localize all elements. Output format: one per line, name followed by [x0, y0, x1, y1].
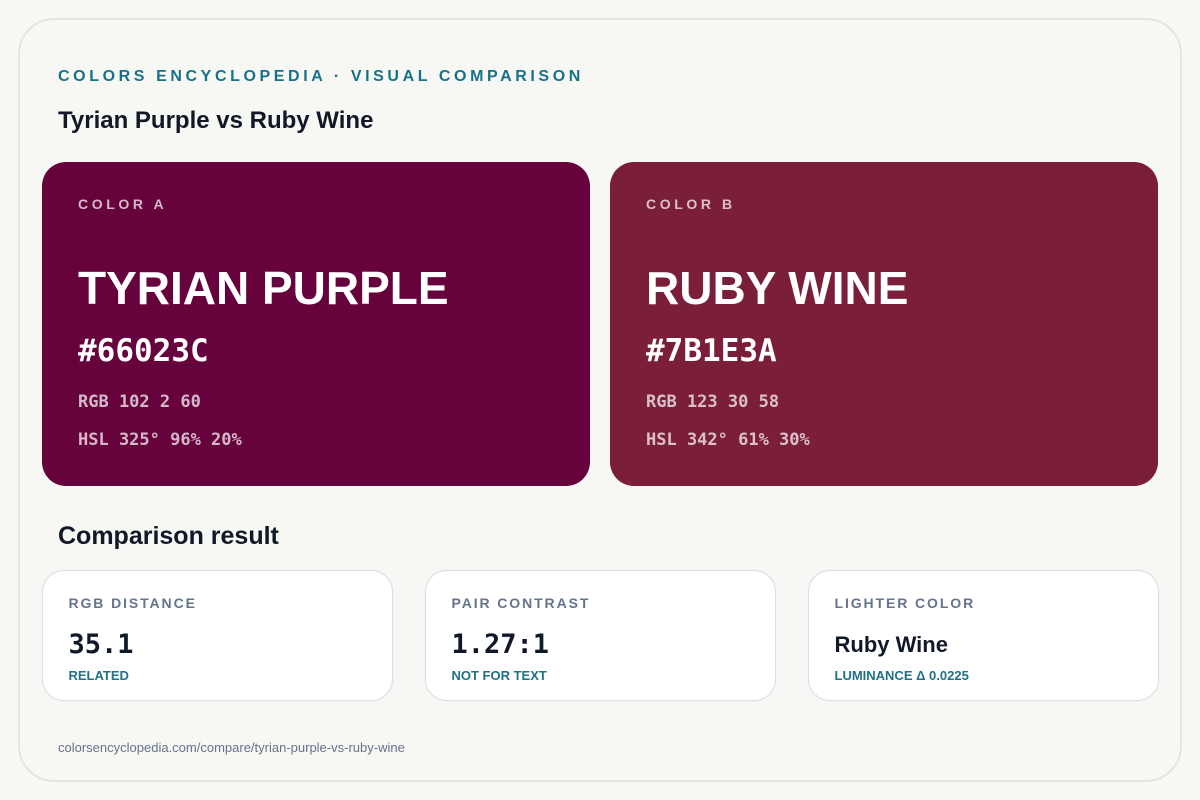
color B name: RUBY WINE: [646, 262, 908, 314]
eyebrow heading: COLORS ENCYCLOPEDIA · VISUAL COMPARISON: [58, 68, 584, 84]
card value: 35.1: [68, 629, 134, 660]
card value: 1.27:1: [452, 629, 549, 660]
card label: RGB DISTANCE: [68, 595, 197, 611]
footer url: colorsencyclopedia.com/compare/tyrian-purple-vs-ruby-wine: [58, 740, 405, 755]
color B RGB: RGB 123 30 58: [646, 392, 779, 412]
card note: RELATED: [68, 668, 129, 683]
card label: LIGHTER COLOR: [834, 595, 975, 611]
card value: Ruby Wine: [834, 632, 948, 657]
color B label: COLOR B: [646, 196, 736, 212]
color A label: COLOR A: [78, 196, 167, 212]
card: RGB distance: [42, 570, 392, 701]
card note: NOT FOR TEXT: [452, 668, 547, 683]
color A HSL: HSL 325° 96% 20%: [78, 430, 242, 450]
panel: color B: [610, 162, 1158, 486]
color A hex: #66023C: [78, 333, 209, 369]
card: lighter color: [808, 570, 1158, 701]
color A name: TYRIAN PURPLE: [78, 262, 449, 314]
title: Tyrian Purple vs Ruby Wine: [58, 106, 373, 134]
color B hex: #7B1E3A: [646, 333, 777, 369]
card note: LUMINANCE Δ 0.0225: [834, 668, 969, 683]
card label: PAIR CONTRAST: [452, 595, 590, 611]
section heading: Comparison result: [58, 522, 279, 550]
color A RGB: RGB 102 2 60: [78, 392, 201, 412]
color B HSL: HSL 342° 61% 30%: [646, 430, 810, 450]
card: pair contrast: [424, 570, 776, 701]
panel: color A: [42, 162, 590, 486]
